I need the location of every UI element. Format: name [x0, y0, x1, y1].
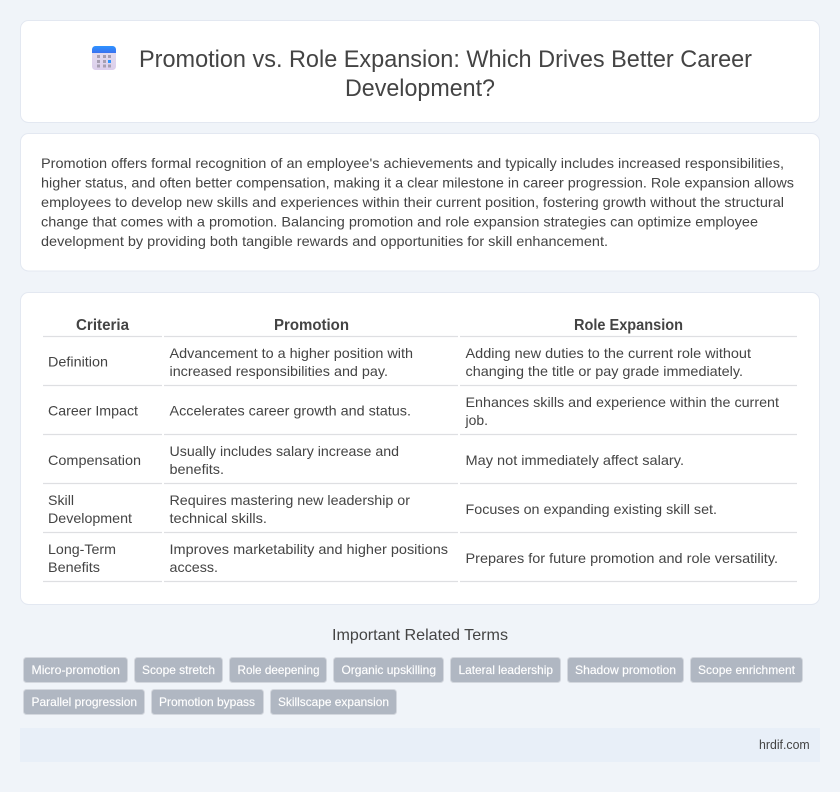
row: compensation: [48, 443, 684, 477]
row: compensation: Usually includes salary increase and: [170, 443, 399, 459]
footer source text: hrdif.com: [759, 738, 810, 752]
heading: important related terms: Important Related Terms: [332, 627, 508, 644]
row: definition: Advancement to a higher position with: [170, 345, 413, 361]
row: long-term benefits: Long-Term: [48, 541, 116, 557]
row: definition: changing the title or pay grade immediately.: [466, 363, 743, 379]
row: long-term benefits: Benefits: [48, 559, 100, 575]
tag: promotion bypass: [152, 690, 264, 714]
title: Promotion vs. Role Expansion: Which Drives Better Career: [139, 46, 752, 73]
panel: comparison table: [20, 292, 820, 604]
row: long-term benefits: Improves marketability and higher positions: [170, 541, 448, 557]
tag: scope enrichment: [690, 658, 802, 682]
row: long-term benefits: [48, 541, 778, 575]
tag: shadow promotion: [568, 658, 684, 682]
tag: scope enrichment: Scope enrichment: [698, 663, 796, 677]
tag list: [24, 658, 802, 714]
footer bar: [20, 728, 820, 762]
table header row: Promotion: [274, 317, 349, 334]
row: long-term benefits: Prepares for future promotion and role versatility.: [466, 550, 778, 566]
tag: micro-promotion: [24, 658, 128, 682]
panel: title card: [20, 20, 820, 122]
row: skill development: Focuses on expanding existing skill set.: [466, 501, 717, 517]
row: compensation: May not immediately affect salary.: [466, 452, 684, 468]
tag: organic upskilling: Organic upskilling: [342, 663, 436, 677]
tag: role deepening: [230, 658, 326, 682]
row: skill development: Requires mastering new leadership or: [170, 492, 410, 508]
summary paragraph: employees to develop new skills and experiences within their current position, fostering growth without the structural: [41, 194, 784, 210]
tag: scope stretch: [134, 658, 222, 682]
row: career impact: Accelerates career growth and status.: [170, 402, 411, 418]
tag: shadow promotion: Shadow promotion: [575, 663, 676, 677]
summary paragraph: Promotion offers formal recognition of an employee's achievements and typically includes increased responsibilities,: [41, 155, 784, 171]
tag: micro-promotion: Micro-promotion: [32, 663, 120, 677]
row: skill development: technical skills.: [170, 510, 267, 526]
panel: summary: [20, 134, 820, 271]
title: Development?: [345, 75, 495, 102]
title: [139, 46, 752, 102]
tag: organic upskilling: [334, 658, 444, 682]
icon: calendar: [92, 46, 116, 70]
table header row: Role Expansion: [574, 317, 683, 334]
row: long-term benefits: access.: [170, 559, 218, 575]
summary paragraph: development by providing both tangible rewards and opportunities for skill enhancement.: [41, 233, 608, 249]
table header row: Criteria: [76, 317, 129, 334]
row: skill development: Skill: [48, 492, 74, 508]
tag: lateral leadership: Lateral leadership: [458, 663, 553, 677]
tag: promotion bypass: Promotion bypass: [159, 695, 255, 709]
row: skill development: Development: [48, 510, 132, 526]
row: career impact: [48, 394, 779, 428]
table header row: [76, 317, 683, 334]
row: skill development: [48, 492, 717, 526]
row: career impact: Career Impact: [48, 402, 138, 418]
summary paragraph: [41, 155, 794, 249]
row: career impact: Enhances skills and experience within the current: [466, 394, 779, 410]
row: career impact: job.: [465, 412, 488, 428]
tag: scope stretch: Scope stretch: [142, 663, 215, 677]
row: definition: Definition: [48, 354, 108, 370]
summary paragraph: change that comes with a promotion. Balancing promotion and role expansion strategies can optimize employee: [41, 214, 758, 230]
row: compensation: Compensation: [48, 452, 141, 468]
tag: role deepening: Role deepening: [238, 663, 320, 677]
tag: skillscape expansion: [270, 690, 396, 714]
tag: lateral leadership: [450, 658, 560, 682]
row: compensation: benefits.: [170, 461, 224, 477]
summary paragraph: higher status, and often better compensation, making it a clear milestone in career progression. Role expansion allows: [41, 174, 794, 190]
row: definition: [48, 345, 751, 379]
row: definition: Adding new duties to the current role without: [466, 345, 751, 361]
tag: parallel progression: [24, 690, 144, 714]
row: definition: increased responsibilities and pay.: [170, 363, 388, 379]
tag: skillscape expansion: Skillscape expansion: [278, 695, 389, 709]
tag: parallel progression: Parallel progression: [32, 695, 137, 709]
